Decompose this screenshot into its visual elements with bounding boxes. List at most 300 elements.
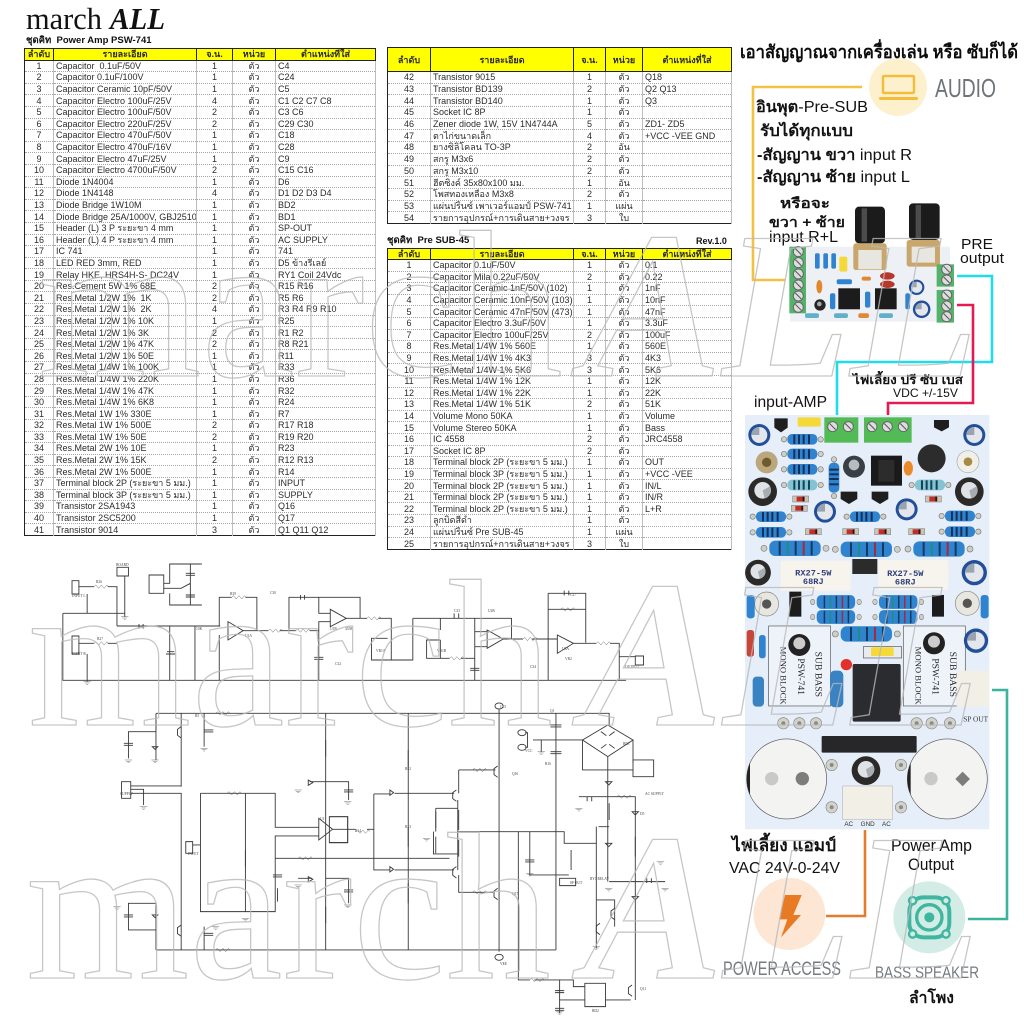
table header row: Q2 Q13: [645, 84, 677, 94]
table header row: Diode 1N4004: [56, 177, 114, 187]
table header row: ตัว: [249, 490, 259, 500]
table header row: 9: [36, 154, 42, 164]
table header row: 1: [212, 467, 217, 477]
wire: amp to speaker: [968, 690, 1007, 919]
table header row: ยางซิลิโคลน TO-3P: [433, 142, 511, 152]
label: AC supply: ไฟเลี้ยง แอมป์: [730, 832, 836, 855]
table header row: รายละเอียด: [102, 49, 148, 59]
table header row: 1: [212, 200, 217, 210]
table header row: 1: [212, 513, 217, 523]
table header row: C3 C6: [278, 107, 304, 117]
table header row: 741: [278, 246, 293, 256]
table header row: รายละเอียด: [479, 249, 525, 259]
table header row: Transistor 2SA1943: [56, 501, 135, 511]
table header row: 1: [212, 61, 217, 71]
ICs: [838, 288, 897, 309]
cement resistors: [781, 560, 948, 591]
table header row: 18: [34, 258, 44, 268]
transistor pad: right: [903, 626, 965, 706]
table header row: ตัว: [619, 481, 629, 491]
transistor pad: right: PSW-741: [930, 658, 941, 695]
table header row: 1: [212, 246, 217, 256]
table header row: 24: [404, 527, 414, 537]
table header row: 8: [406, 341, 412, 351]
table header row: 32: [34, 420, 44, 430]
table header row: R32: [278, 386, 295, 396]
table header row: 37: [34, 478, 44, 488]
table header row: 1: [587, 457, 592, 467]
table header row: 1: [587, 96, 592, 106]
table: Power Amp parts list continued: [387, 47, 732, 224]
schematic component labels: U1: [320, 817, 325, 821]
table header row: 23: [34, 316, 44, 326]
main filter capacitors: [747, 739, 987, 819]
table header row: Res.Metal 1W 1% 500E: [56, 420, 152, 430]
table header row: Capacitor 0.1uF/100V: [56, 72, 144, 82]
table header row: 47: [404, 131, 414, 141]
schematic component labels: VR2: [565, 657, 572, 661]
table header row: ตัว: [619, 365, 629, 375]
table header row: 24: [34, 328, 44, 338]
table header row: Res.Metal 2W 1% 15K: [56, 455, 147, 465]
table header row: 11: [34, 177, 44, 187]
label: PRE output: output: [960, 250, 1005, 267]
table header row: 14: [404, 411, 414, 421]
table header row: 1: [406, 260, 412, 270]
table header row: 1: [212, 270, 217, 280]
table header row: 2: [587, 272, 592, 282]
table header row: ตัว: [249, 107, 259, 117]
table header row: C9: [278, 154, 290, 164]
watermark: march ALL outlines: ALL: [571, 190, 979, 422]
table header row: 1: [587, 515, 592, 525]
table header row: 2: [212, 281, 217, 291]
table header row: 12: [34, 188, 44, 198]
cement resistors: 68RJ: [895, 578, 916, 588]
table header row: Res.Metal 1/4W 1% 5K6: [433, 365, 531, 375]
table header row: 1: [587, 376, 592, 386]
table header row: 1: [212, 374, 217, 384]
table header row: ตัว: [249, 235, 259, 245]
table header row: Terminal block 2P (ระยะขา 5 มม.): [433, 492, 568, 502]
table header row: 29: [34, 386, 44, 396]
label: POWER ACCESS: POWER ACCESS: [723, 959, 841, 980]
table header row: 49: [404, 154, 414, 164]
table header row: ตัว: [249, 130, 259, 140]
table header row: ตัว: [619, 84, 629, 94]
schematic component labels: U2B: [488, 609, 495, 613]
table header row: 19: [404, 469, 414, 479]
table header row: ตัว: [619, 515, 629, 525]
table header row: C1 C2 C7 C8: [278, 96, 332, 106]
table header row: C18: [278, 130, 295, 140]
table header row: R15 R16: [278, 281, 314, 291]
table header row: ตัว: [619, 330, 629, 340]
table header row: 2: [212, 455, 217, 465]
table header row: 1: [212, 490, 217, 500]
table header row: 35: [34, 455, 44, 465]
table header row: 3: [36, 84, 42, 94]
table header row: BD1: [278, 212, 296, 222]
table header row: ตัว: [249, 513, 259, 523]
right terminal blocks: [937, 264, 954, 323]
table header row: ตัว: [249, 316, 259, 326]
table header row: 6: [406, 318, 412, 328]
table header row: 36: [34, 467, 44, 477]
table header row: 20: [404, 481, 414, 491]
table header row: 12K: [645, 376, 661, 386]
transistor pad: left: [769, 626, 831, 706]
table header row: 1: [587, 469, 592, 479]
schematic component labels: 4558: [345, 627, 352, 631]
icon: bass speaker: [893, 881, 965, 953]
table header row: สกรู M3x6: [433, 154, 473, 164]
table header row: Capacitor Electro 470uF/50V: [56, 130, 172, 140]
label: pre-amp supply voltage: ไฟเลี้ยง ปรี ซับ เบส: [851, 370, 964, 387]
table header row: Capacitor Ceramic 1nF/50V (102): [433, 283, 568, 293]
table header row: 34: [34, 443, 44, 453]
table header row: ใบ: [619, 539, 629, 549]
table header row: ตัว: [249, 61, 259, 71]
table header row: 4: [212, 188, 217, 198]
table header row: 41: [34, 525, 44, 535]
table header row: IC 4558: [433, 434, 465, 444]
table header row: 42: [404, 72, 414, 82]
table header row: 21: [34, 293, 44, 303]
table header row: 1: [587, 341, 592, 351]
table header row: 16: [34, 235, 44, 245]
table header row: 0.22: [645, 272, 663, 282]
table header row: 2: [406, 272, 412, 282]
photo: PSW-741 amplifier board: [745, 415, 989, 829]
table header row: 7: [406, 330, 412, 340]
table header row: Res.Metal 1/2W 1% 3K: [56, 328, 149, 338]
table header row: 10: [404, 365, 414, 375]
table header row: Terminal block 2P (ระยะขา 5 มม.): [433, 504, 568, 514]
table header row: ตัว: [249, 339, 259, 349]
schematic component labels: OUTPUT: [625, 665, 640, 669]
table header row: 4: [406, 295, 412, 305]
table header row: ตำแหน่งที่ใส่: [662, 249, 712, 259]
table header row: 0.1: [645, 260, 658, 270]
table header row: 50: [404, 166, 414, 176]
table header row: ตัว: [619, 504, 629, 514]
schematic component labels: VEE: [500, 962, 508, 966]
schematic component labels: RY1 RELAY: [590, 877, 610, 881]
schematic component labels: R13: [405, 825, 411, 829]
table header row: ตัว: [619, 434, 629, 444]
table header row: Diode 1N4148: [56, 188, 114, 198]
table header row: 2: [212, 432, 217, 442]
table header row: Capacitor Electro 470uF/16V: [56, 142, 172, 152]
table header row: 1: [212, 386, 217, 396]
watermark: march ALL outlines: march: [28, 539, 553, 771]
table header row: Res.Metal 1/4W 1% 220K: [56, 374, 159, 384]
table header row: 28: [34, 374, 44, 384]
table header row: 1: [587, 307, 592, 317]
table header row: SP-OUT: [278, 223, 312, 233]
table header row: 2: [212, 328, 217, 338]
label: Power Amp Output: Output: [908, 856, 954, 874]
table header row: ตัว: [249, 270, 259, 280]
table header row: 1: [212, 154, 217, 164]
table header row: Res.Metal 1/2W 1% 10K: [56, 316, 154, 326]
schematic component labels: C27: [570, 593, 576, 597]
table header row: 2: [587, 189, 592, 199]
transistor pad: right: MONO BLOCK: [913, 647, 923, 705]
table header row: Transistor 9015: [433, 72, 495, 82]
table header row: หน่วย: [243, 49, 265, 59]
schematic component labels: R14: [355, 829, 361, 833]
table header row: R8 R21: [278, 339, 309, 349]
table header row: ตัว: [249, 84, 259, 94]
schematic component labels: VCC: [525, 749, 533, 753]
table header row: หน่วย: [613, 249, 635, 259]
table header row: +VCC -VEE: [645, 469, 693, 479]
schematic component labels: INPUT R: [72, 652, 86, 656]
table header row: 5: [36, 107, 42, 117]
table header row: Res.Metal 1/2W 1% 2K: [56, 304, 152, 314]
table header row: 7: [36, 130, 42, 140]
schematic component labels: AC SUPPLY: [645, 792, 664, 796]
table header row: 100uF: [645, 330, 671, 340]
table header row: Res.Metal 1/2W 1% 50E: [56, 351, 154, 361]
table header row: L+R: [645, 504, 662, 514]
table header row: 3: [587, 539, 592, 549]
table header row: R3 R4 R9 R10: [278, 304, 337, 314]
input terminal blocks: [824, 417, 912, 443]
table header row: ตัว: [249, 119, 259, 129]
table header row: 33: [34, 432, 44, 442]
table header row: Res.Metal 1/2W 1% 1K: [56, 293, 152, 303]
schematic component labels: Q1: [550, 709, 555, 713]
table header row: 1: [587, 481, 592, 491]
table header row: Volume Stereo 50KA: [433, 423, 517, 433]
table header row: ตัว: [249, 258, 259, 268]
table header row: IC 741: [56, 246, 83, 256]
schematic component labels: Q11: [640, 987, 646, 991]
table header row: ใบ: [619, 213, 629, 223]
table header row: R24: [278, 397, 295, 407]
table header row: 1: [212, 397, 217, 407]
table header row: Capacitor Electro 220uF/25V: [56, 119, 172, 129]
table header row: 1: [587, 318, 592, 328]
icon: power lightning bolt: [753, 878, 825, 950]
table header row: ตัว: [249, 478, 259, 488]
table header row: จ.น.: [206, 49, 223, 59]
schematic component labels: R5: [195, 714, 199, 718]
table header row: Res.Metal 1W 1% 50E: [56, 432, 147, 442]
text block: Pre-SUB input notes: รับได้ทุกแบบ: [760, 121, 853, 141]
table header row: 1: [212, 478, 217, 488]
table header row: 5: [587, 119, 592, 129]
table header row: Diode Bridge 25A/1000V, GBJ2510: [56, 212, 196, 222]
table header row: ตัว: [249, 293, 259, 303]
table header row: Diode Bridge 1W10M: [56, 200, 142, 210]
text block: Pre-SUB input notes: -สัญญาน ซ้าย input L: [757, 168, 910, 186]
SP OUT connector: [957, 671, 989, 724]
AC connector: [843, 786, 893, 828]
table header row: ตำแหน่งที่ใส่: [301, 49, 350, 59]
table header row: 1: [212, 351, 217, 361]
table header row: ตัว: [249, 455, 259, 465]
schematic component labels: U1A: [245, 634, 252, 638]
table header row: 2: [212, 339, 217, 349]
table header row: 1: [587, 178, 592, 188]
table header row: ตัว: [619, 283, 629, 293]
power-amp section wiring: [128, 709, 665, 1013]
table header row: 2: [587, 166, 592, 176]
table header row: ตัว: [249, 362, 259, 372]
table header row: 21: [404, 492, 414, 502]
table header row: 1: [212, 177, 217, 187]
table header row: 2: [587, 446, 592, 456]
table header row: ตัว: [619, 295, 629, 305]
table header row: 39: [34, 501, 44, 511]
schematic component labels: U1B: [330, 627, 337, 631]
table header row: Terminal block 3P (ระยะขา 5 มม.): [56, 490, 191, 500]
table header row: 2: [587, 142, 592, 152]
table header row: 47nF: [645, 307, 666, 317]
table header row: 1: [212, 409, 217, 419]
table header row: ตัว: [249, 200, 259, 210]
schematic component labels: R39: [230, 592, 236, 596]
table header row: รายการอุปกรณ์+การเดินสาย+วงจร: [433, 539, 570, 549]
table header row: 25: [34, 339, 44, 349]
schematic component labels: C30: [270, 591, 276, 595]
table header row: ตัว: [619, 341, 629, 351]
table header row: อัน: [618, 178, 630, 188]
table header row: 4: [587, 131, 592, 141]
schematic component labels: INPUT: [188, 852, 199, 856]
table header row: 12: [404, 388, 414, 398]
table header row: C4: [278, 61, 290, 71]
relay: [853, 664, 901, 722]
table header row: Res.Metal 1/4W 1% 6K8: [56, 397, 154, 407]
table header row: 48: [404, 142, 414, 152]
table header row: 1: [587, 72, 592, 82]
table header row: Res.Metal 1/4W 1% 51K: [433, 399, 531, 409]
wire: audio to pre input: [753, 87, 862, 280]
table header row: Socket IC 8P: [433, 446, 486, 456]
table header row: 17: [34, 246, 44, 256]
table header row: 44: [404, 96, 414, 106]
table header row: 1: [212, 235, 217, 245]
table header row: 1: [587, 295, 592, 305]
table header row: 4K3: [645, 353, 661, 363]
table header row: 1: [587, 504, 592, 514]
text block: Pre-SUB input notes: หรือจะ: [780, 195, 830, 211]
transistor pad: right: SUB BASS: [947, 652, 958, 697]
table header row: จ.น.: [581, 54, 598, 64]
table header row: ตัว: [249, 467, 259, 477]
IC socket: [871, 456, 902, 486]
table header row: 43: [404, 84, 414, 94]
table header row: 52: [404, 189, 414, 199]
schematic component labels: 10K: [196, 627, 203, 631]
watermark: march ALL outlines: march: [38, 190, 563, 422]
watermark: march ALL outlines: ALL: [572, 539, 980, 771]
table header row: 26: [34, 351, 44, 361]
table header row: Terminal block 3P (ระยะขา 5 มม.): [433, 469, 568, 479]
table header row: ตัว: [249, 397, 259, 407]
table header row: 25: [404, 539, 414, 549]
table header row: ตัว: [249, 142, 259, 152]
table header row: 3: [587, 213, 592, 223]
table header row: R1 R2: [278, 328, 304, 338]
table header row: ตัว: [249, 328, 259, 338]
table header row: Res.Metal 1/4W 1% 100K: [56, 362, 159, 372]
table header row: R12 R13: [278, 455, 314, 465]
table header row: Q18: [645, 72, 662, 82]
table header row: 2: [587, 399, 592, 409]
table header row: 46: [404, 119, 414, 129]
table header row: Header (L) 4 P ระยะขา 4 mm: [56, 235, 173, 245]
table header row: C5: [278, 84, 290, 94]
schematic component labels: R26: [96, 580, 102, 584]
table header row: [388, 48, 731, 223]
table header row: 1: [212, 223, 217, 233]
table header row: 4: [36, 96, 42, 106]
schematic component labels: D5: [640, 812, 645, 816]
table header row: R23: [278, 443, 295, 453]
table header row: Transistor BD139: [433, 84, 503, 94]
table header row: LED RED 3mm, RED: [56, 258, 142, 268]
schematic component labels: VR1B: [437, 649, 447, 653]
table header row: Transistor BD140: [433, 96, 503, 106]
table header row: Terminal block 2P (ระยะขา 5 มม.): [433, 481, 568, 491]
heading: Power Amp PSW-741 kit: ชุดคิท Power Amp PSW-741: [26, 35, 152, 46]
table header row: 3: [406, 283, 412, 293]
photo: Pre SUB-45 board: [789, 203, 954, 323]
label: AUDIO: AUDIO: [935, 73, 996, 103]
table header row: 1: [212, 142, 217, 152]
table header row: โพสทองเหลือง M3x8: [433, 189, 514, 199]
table header row: 9: [406, 353, 412, 363]
table header row: 1: [212, 362, 217, 372]
table header row: ตัว: [249, 351, 259, 361]
table header row: Volume Mono 50KA: [433, 411, 513, 421]
table header row: Capacitor Ceramic 10pF/50V: [56, 84, 172, 94]
cement resistors: RX27-5W: [795, 568, 832, 578]
table header row: R36: [278, 374, 295, 384]
table header row: Q1 Q11 Q12: [278, 525, 328, 535]
schematic component labels: R27: [97, 637, 103, 641]
schematic component labels: Q17: [512, 892, 518, 896]
schematic component labels: R12: [405, 767, 411, 771]
table header row: Capacitor Electro 4700uF/50V: [56, 165, 177, 175]
table header row: ตัว: [619, 388, 629, 398]
heading: Pre SUB-45 kit: ชุดคิท Pre SUB-45: [387, 235, 469, 246]
table header row: ตัว: [619, 72, 629, 82]
table header row: Res.Metal 1W 1% 330E: [56, 409, 152, 419]
table header row: Res.Metal 1/4W 1% 22K: [433, 388, 531, 398]
table header row: 2: [212, 293, 217, 303]
table header row: 2: [212, 165, 217, 175]
table header row: 3: [212, 525, 217, 535]
table header row: 2: [212, 107, 217, 117]
table header row: ตัว: [249, 165, 259, 175]
table header row: 20: [34, 281, 44, 291]
table header row: ตัว: [249, 246, 259, 256]
table header row: ตัว: [619, 154, 629, 164]
table header row: IN/L: [645, 481, 662, 491]
table header row: แผ่น: [615, 527, 633, 537]
table header row: D5 ข้างรีเลย์: [278, 258, 326, 268]
table header row: 40: [34, 513, 44, 523]
table header row: ตัว: [249, 188, 259, 198]
table header row: สกรู M3x10: [433, 166, 478, 176]
